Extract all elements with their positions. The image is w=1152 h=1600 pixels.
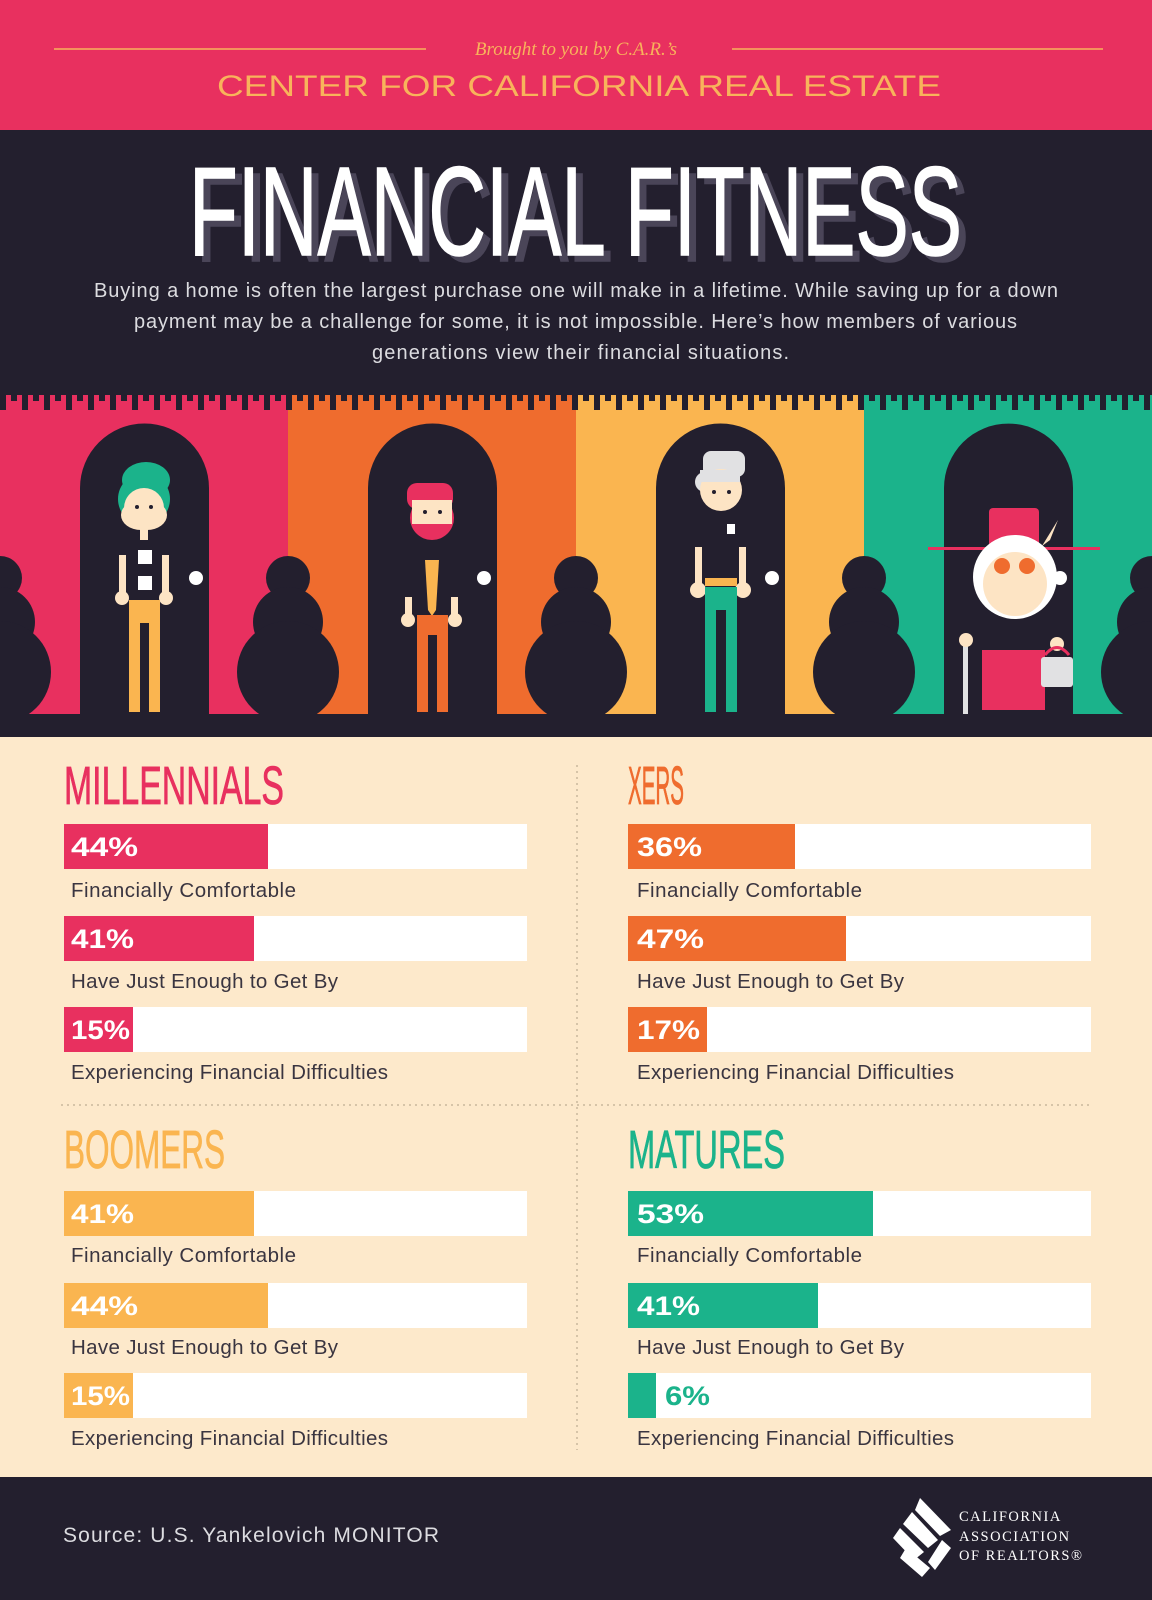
panel: millennials: Financially Comfortable (71, 879, 296, 902)
character: xer (401, 483, 462, 712)
panel: xers: Financially Comfortable (637, 879, 862, 902)
logo icon (893, 1498, 951, 1577)
stats panel background (0, 737, 1152, 1477)
logo text: OF REALTORS® (959, 1548, 1084, 1564)
character: boomer (690, 451, 751, 712)
panel: matures: Experiencing Financial Difficulties (637, 1427, 954, 1450)
intro text (94, 280, 1058, 364)
panel: xers: Have Just Enough to Get By (637, 970, 905, 993)
panel: millennials: Have Just Enough to Get By (71, 970, 339, 993)
panel: xers: 47% (637, 924, 704, 954)
logo text: CALIFORNIA (959, 1509, 1062, 1525)
character: mature (928, 508, 1100, 717)
illustration band (0, 395, 1152, 738)
logo text: ASSOCIATION (959, 1529, 1071, 1545)
panel: matures: Financially Comfortable (637, 1244, 862, 1267)
intro text: Buying a home is often the largest purchase one will make in a lifetime. While saving up for a down (94, 280, 1058, 302)
panel: xers: 17% (637, 1015, 700, 1045)
panel: boomers: Financially Comfortable (71, 1244, 296, 1267)
panel: millennials: 41% (71, 924, 134, 954)
brought to you by: Brought to you by C.A.R.’s (475, 39, 677, 60)
intro text: payment may be a challenge for some, it is not impossible. Here’s how members of various (134, 311, 1017, 333)
panel: matures: Have Just Enough to Get By (637, 1336, 905, 1359)
footer (0, 1477, 1152, 1600)
intro text: generations view their financial situations. (372, 342, 789, 364)
panel: xers: 36% (637, 832, 702, 862)
panel: boomers: Experiencing Financial Difficulties (71, 1427, 388, 1450)
panel: matures: MATURES (628, 1120, 785, 1180)
panel: matures (628, 1120, 1091, 1450)
panel: boomers: 41% (71, 1199, 134, 1229)
panel: boomers: Have Just Enough to Get By (71, 1336, 339, 1359)
arches and knobs (80, 424, 1073, 714)
bushes (0, 556, 1152, 723)
panel: matures: 41% (637, 1291, 700, 1321)
panel: xers: XERS (628, 756, 684, 816)
panel: matures: 53% (637, 1199, 704, 1229)
panel: millennials: Experiencing Financial Difficulties (71, 1061, 388, 1084)
logo text (959, 1509, 1084, 1564)
panel: matures: 6% (665, 1381, 710, 1411)
panel: boomers: 44% (71, 1291, 138, 1321)
panel: millennials: 15% (71, 1015, 130, 1045)
panel: boomers: BOOMERS (64, 1120, 225, 1180)
panel: boomers (64, 1120, 527, 1450)
title area (0, 130, 1152, 395)
panel: millennials (64, 756, 527, 1084)
panel: xers (628, 756, 1091, 1084)
panel: xers: Experiencing Financial Difficulties (637, 1061, 954, 1084)
panel: boomers: 15% (71, 1381, 130, 1411)
center for california real estate: CENTER FOR CALIFORNIA REAL ESTATE (217, 70, 941, 103)
header band (0, 0, 1152, 130)
panel: millennials: MILLENNIALS (64, 756, 284, 816)
character: millennial (115, 462, 173, 712)
panel: millennials: 44% (71, 832, 138, 862)
source text: Source: U.S. Yankelovich MONITOR (63, 1524, 439, 1547)
